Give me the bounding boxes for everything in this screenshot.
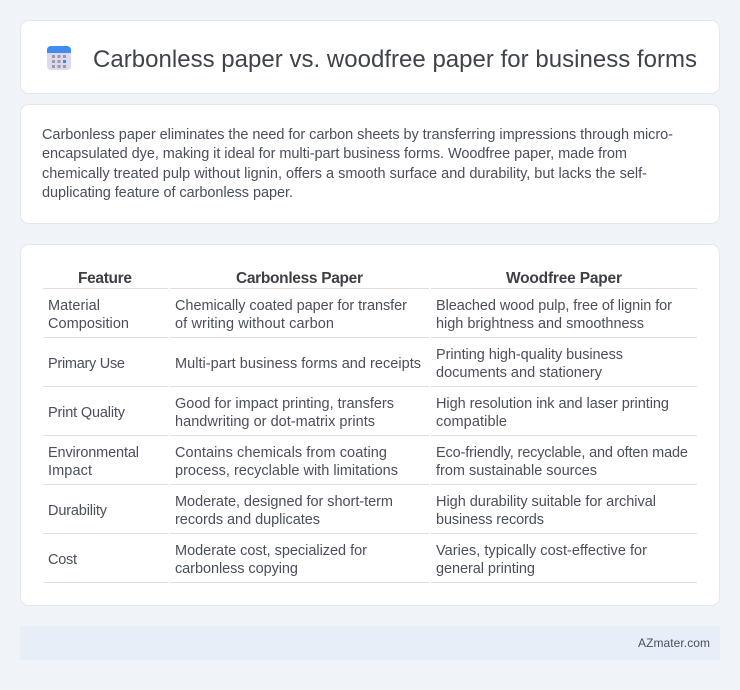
intro text: encapsulated dye, making it ideal for multi-part business forms. Woodfree paper, made from bbox=[42, 146, 627, 162]
intro text bbox=[42, 127, 673, 201]
row: durability: High durability suitable for archival bbox=[436, 494, 656, 510]
row: durability: records and duplicates bbox=[175, 512, 320, 528]
row: cost: Moderate cost, specialized for bbox=[175, 543, 367, 559]
row: primary use: Printing high-quality business bbox=[436, 347, 623, 363]
row: print quality: High resolution ink and laser printing bbox=[436, 396, 669, 412]
icon: calendar bbox=[47, 46, 71, 70]
row: print quality: Good for impact printing, transfers bbox=[175, 396, 394, 412]
intro text: chemically treated pulp without lignin, offers a smooth surface and durability, but lacks the self- bbox=[42, 166, 647, 182]
row: environmental impact: from sustainable sources bbox=[436, 463, 597, 479]
row: durability: Moderate, designed for short-term bbox=[175, 494, 393, 510]
row: environmental impact: Contains chemicals from coating bbox=[175, 445, 387, 461]
row: print quality: compatible bbox=[436, 414, 507, 430]
footer bar bbox=[20, 626, 720, 660]
row: cost: Cost bbox=[48, 552, 77, 568]
intro text: duplicating feature of carbonless paper. bbox=[42, 185, 293, 201]
table header: Carbonless Paper bbox=[236, 270, 363, 287]
row: environmental impact: Environmental bbox=[48, 445, 139, 461]
row: primary use: Multi-part business forms and receipts bbox=[175, 356, 421, 372]
row: primary use: documents and stationery bbox=[436, 365, 603, 381]
row: cost: carbonless copying bbox=[175, 561, 298, 577]
row: durability: business records bbox=[436, 512, 544, 528]
table header: Woodfree Paper bbox=[506, 270, 622, 287]
row: primary use bbox=[48, 347, 623, 381]
row: durability: Durability bbox=[48, 503, 108, 519]
row: cost: general printing bbox=[436, 561, 535, 577]
row: primary use: Primary Use bbox=[48, 356, 125, 372]
intro text: Carbonless paper eliminates the need for carbon sheets by transferring impressions through micro- bbox=[42, 127, 673, 143]
row: cost bbox=[48, 543, 647, 577]
row: environmental impact: Impact bbox=[48, 463, 92, 479]
title: Carbonless paper vs. woodfree paper for business forms bbox=[93, 46, 697, 73]
row: print quality bbox=[48, 396, 669, 430]
row: environmental impact bbox=[48, 445, 688, 479]
row: environmental impact: process, recyclable with limitations bbox=[175, 463, 398, 479]
panel: header bbox=[20, 20, 720, 94]
row: print quality: Print Quality bbox=[48, 405, 126, 421]
row: material composition: high brightness and smoothness bbox=[436, 316, 644, 332]
row: material composition: Chemically coated paper for transfer bbox=[175, 298, 407, 314]
table header: Feature bbox=[78, 270, 132, 287]
row: environmental impact: Eco-friendly, recyclable, and often made bbox=[436, 445, 688, 461]
row: cost: Varies, typically cost-effective for bbox=[436, 543, 647, 559]
table header bbox=[78, 270, 622, 287]
panel: introduction bbox=[20, 104, 720, 224]
row: material composition: Composition bbox=[48, 316, 129, 332]
row: material composition bbox=[48, 298, 672, 332]
row: material composition: of writing without carbon bbox=[175, 316, 334, 332]
panel: comparison table bbox=[20, 244, 720, 606]
row: material composition: Bleached wood pulp, free of lignin for bbox=[436, 298, 672, 314]
row: durability bbox=[48, 494, 656, 528]
row: print quality: handwriting or dot-matrix prints bbox=[175, 414, 375, 430]
footer credit: AZmater.com bbox=[638, 636, 710, 650]
row: material composition: Material bbox=[48, 298, 100, 314]
